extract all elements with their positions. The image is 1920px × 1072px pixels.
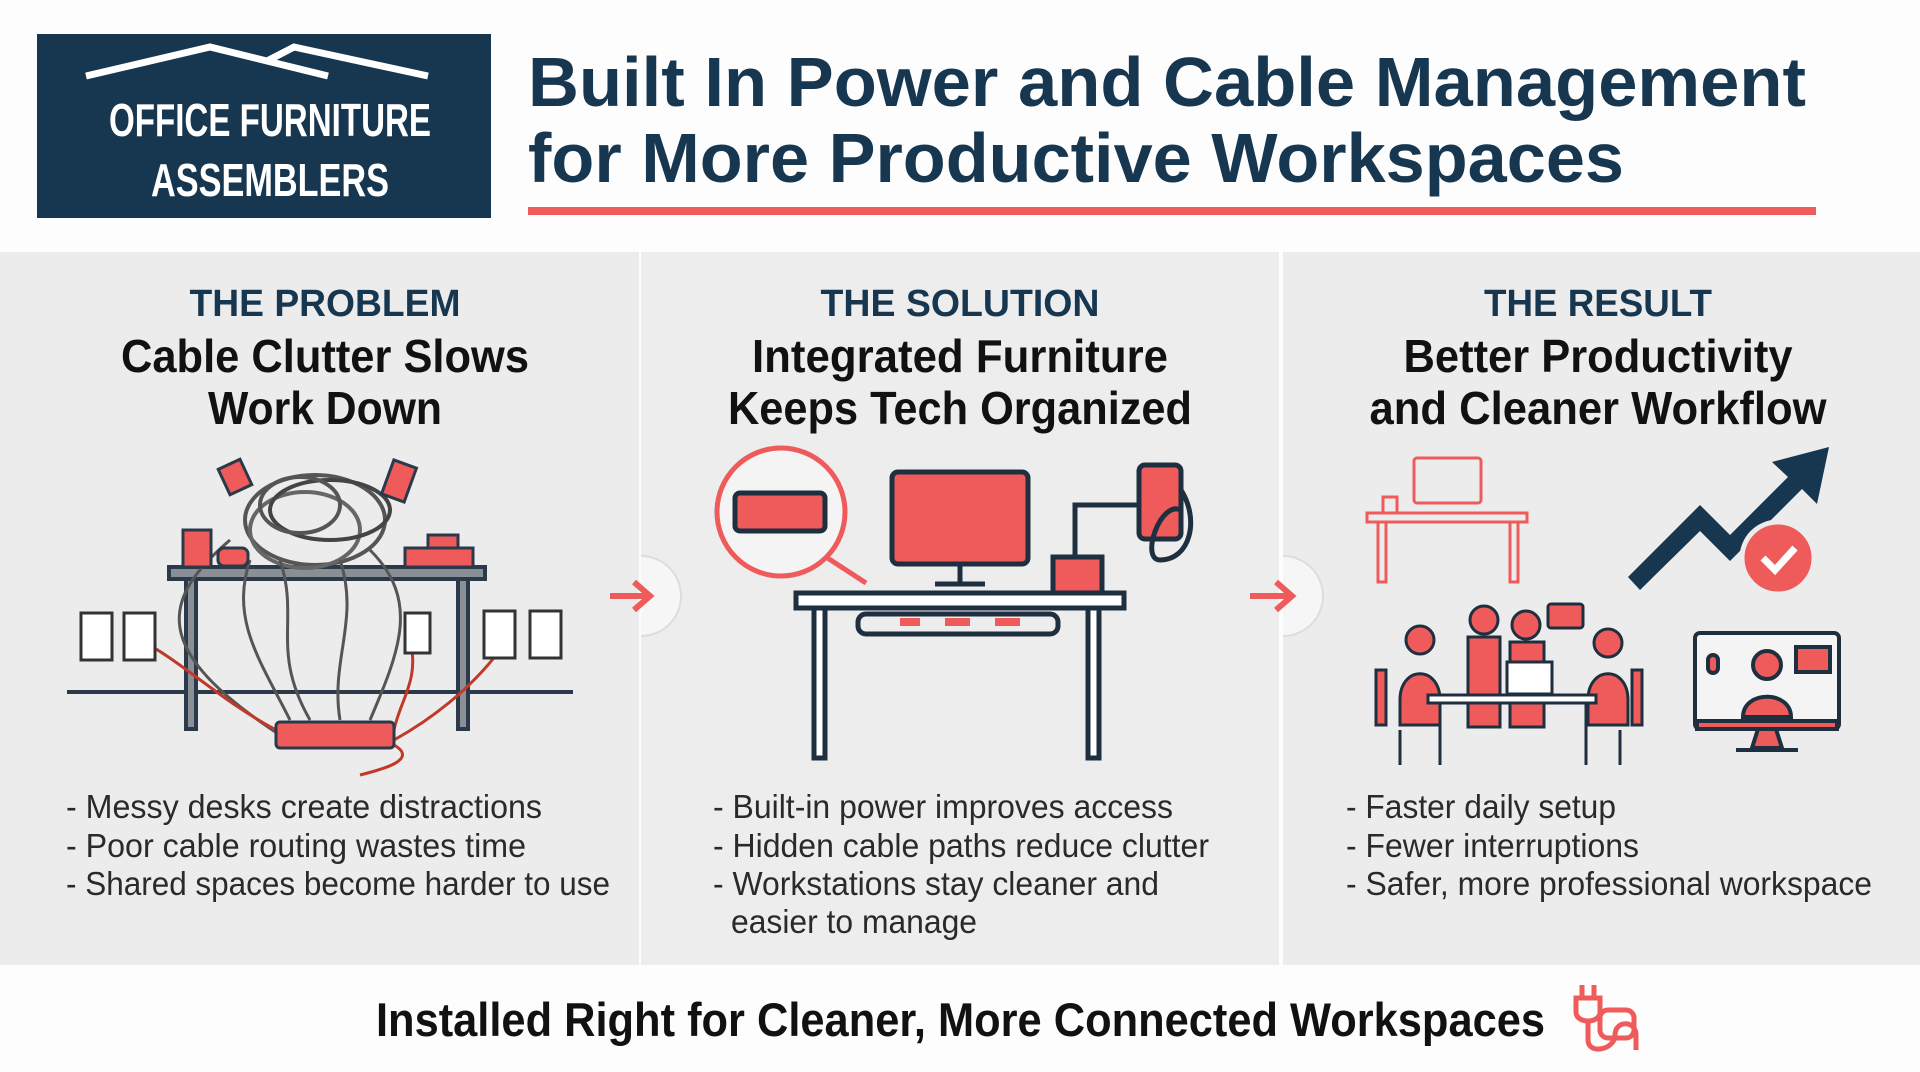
bullets: result: - Safer, more professional workspace [1346,865,1872,902]
bullets: solution: - Workstations stay cleaner and [713,865,1159,902]
panel: problem: Cable Clutter Slows [121,330,529,382]
illustration: messy desk [67,475,573,775]
panel: solution: THE SOLUTION [820,283,1100,325]
panel: problem: Work Down [208,382,442,434]
illustration: organized desk [717,448,1191,758]
title underline [528,207,1816,215]
panel: solution [713,283,1209,940]
bullets: problem: - Messy desks create distractions [66,788,542,825]
panels background [0,252,1920,965]
icon: plug [1576,985,1636,1050]
panel: solution: Integrated Furniture [752,330,1168,382]
bullets: result: - Faster daily setup [1346,788,1616,825]
panel: result [1346,283,1872,902]
bullets: result [1346,788,1872,902]
icon: team meeting [1376,604,1642,765]
panel: result: and Cleaner Workflow [1370,382,1827,434]
icon: video call monitor [1695,633,1839,750]
arrow 2 [1250,556,1323,636]
bullets: solution: easier to manage [731,903,977,940]
bullets: problem: - Poor cable routing wastes time [66,827,526,864]
logo: ASSEMBLERS [151,154,389,206]
arrow 1 [610,556,681,636]
bullets: solution: - Built-in power improves access [713,788,1173,825]
bullets: solution: - Hidden cable paths reduce clutter [713,827,1209,864]
icon: growth arrow with check [1628,447,1829,594]
icon: clean desk [1367,458,1527,582]
panel: result: THE RESULT [1484,283,1712,325]
logo: OFFICE FURNITURE [109,94,431,146]
footer tagline: Installed Right for Cleaner, More Connected Workspaces [376,993,1545,1046]
bullets: solution [713,788,1209,940]
panel: solution: Keeps Tech Organized [728,382,1192,434]
panel: problem [66,283,610,902]
title: Built In Power and Cable Management [528,43,1806,121]
bullets: problem [66,788,610,902]
title: for More Productive Workspaces [528,119,1624,197]
title [528,43,1806,197]
bullets: problem: - Shared spaces become harder to use [66,865,610,902]
panel: result: Better Productivity [1404,330,1793,382]
logo [37,34,491,218]
panel: problem: THE PROBLEM [190,283,460,325]
bullets: result: - Fewer interruptions [1346,827,1639,864]
